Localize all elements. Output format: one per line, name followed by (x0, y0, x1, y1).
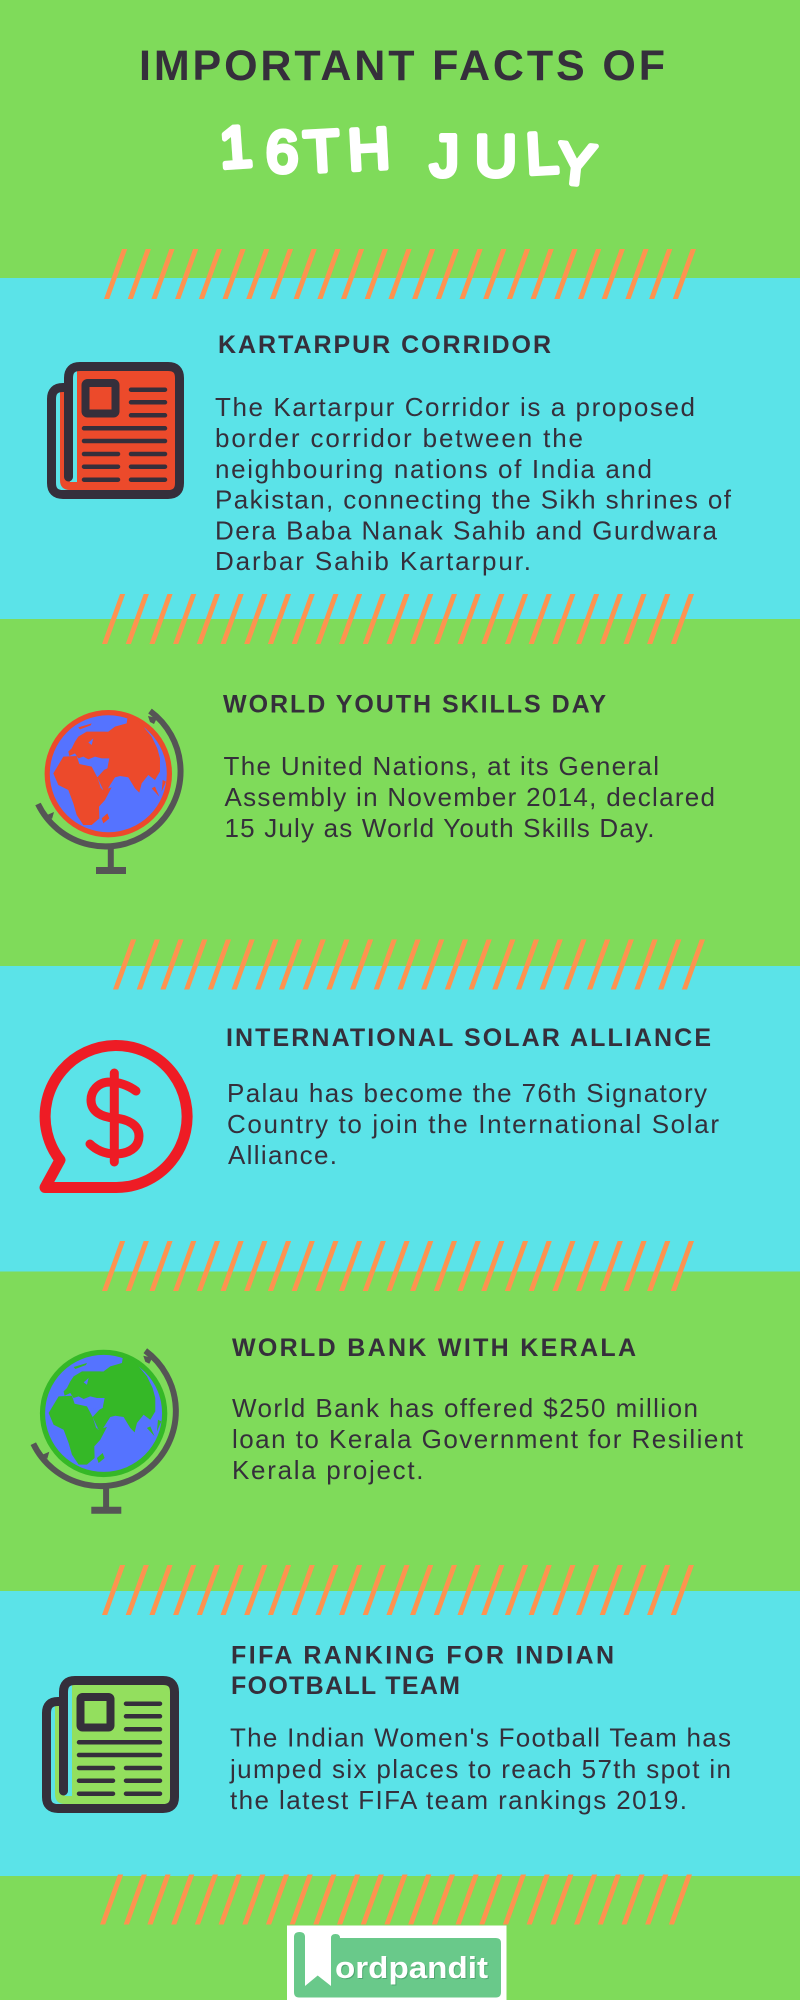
text block: World Bank with Kerala: loan to Kerala Government for Resilient (232, 1424, 744, 1454)
panel: International Solar Alliance (0, 966, 800, 1272)
header panel (0, 0, 800, 278)
stripe divider 2 (102, 594, 694, 644)
text block: World Youth Skills Day: The United Nations, at its General (224, 751, 659, 781)
panel: FIFA Ranking (0, 1591, 800, 1876)
text block: FIFA Ranking: The Indian Women's Football Team has (230, 1722, 731, 1752)
text block: World Youth Skills Day: 15 July as World Youth Skills Day. (224, 813, 654, 843)
heading: FIFA Ranking: FIFA RANKING FOR INDIAN (231, 1642, 614, 1670)
text block: Kartarpur Corridor: neighbouring nations of India and (215, 454, 652, 484)
text block: Kartarpur Corridor (215, 392, 732, 576)
icon: dollar speech bubble (45, 1046, 187, 1188)
title: IMPORTANT FACTS OF (139, 42, 665, 90)
heading: Kartarpur Corridor: KARTARPUR CORRIDOR (218, 331, 551, 359)
text block: FIFA Ranking: jumped six places to reach 57th spot in (229, 1754, 731, 1784)
heading: International Solar Alliance: INTERNATIONAL SOLAR ALLIANCE (226, 1024, 711, 1052)
stripe divider 1 (104, 249, 696, 299)
icon: newspaper red (52, 366, 180, 494)
heading: World Youth Skills Day: WORLD YOUTH SKILLS DAY (223, 690, 606, 718)
text block: Kartarpur Corridor: border corridor between the (215, 423, 583, 453)
text block: International Solar Alliance: Alliance. (228, 1140, 337, 1170)
text block: World Bank with Kerala: World Bank has offered $250 million (232, 1393, 698, 1423)
icon: globe red (38, 710, 181, 874)
panel: World Youth Skills Day (0, 619, 800, 966)
text block: World Youth Skills Day: Assembly in November 2014, declared (224, 782, 715, 812)
date heading: 16TH JULY (217, 114, 599, 199)
heading: FIFA Ranking: FOOTBALL TEAM (231, 1672, 460, 1700)
stripe divider 3 (113, 940, 705, 990)
panel: World Bank with Kerala (0, 1272, 800, 1591)
heading: FIFA Ranking (231, 1642, 614, 1700)
panel: Kartarpur Corridor (0, 278, 800, 619)
text block: World Bank with Kerala (232, 1393, 744, 1485)
text block: FIFA Ranking: the latest FIFA team rankings 2019. (230, 1785, 687, 1815)
text block: International Solar Alliance: Palau has become the 76th Signatory (227, 1078, 707, 1108)
icon: newspaper green (46, 1680, 174, 1808)
text block: Kartarpur Corridor: The Kartarpur Corridor is a proposed (215, 392, 695, 422)
text block: FIFA Ranking (229, 1722, 731, 1815)
footer panel (0, 1876, 800, 2000)
text block: Kartarpur Corridor: Dera Baba Nanak Sahib and Gurdwara (215, 516, 718, 546)
text block: World Youth Skills Day (224, 751, 715, 843)
text block: International Solar Alliance: Country to join the International Solar (227, 1109, 719, 1139)
text block: International Solar Alliance (227, 1078, 719, 1170)
text block: Kartarpur Corridor: Pakistan, connecting the Sikh shrines of (215, 484, 732, 514)
icon: globe green (33, 1350, 176, 1514)
logo: Wordpandit (287, 1926, 506, 2000)
logo: Wordpandit: ordpandit (335, 1950, 488, 1985)
stripe divider 4 (102, 1241, 694, 1291)
text block: World Bank with Kerala: Kerala project. (232, 1455, 424, 1485)
stripe divider 6 (100, 1874, 692, 1924)
stripe divider 5 (102, 1565, 694, 1615)
text block: Kartarpur Corridor: Darbar Sahib Kartarpur. (215, 546, 531, 576)
heading: World Bank with Kerala: WORLD BANK WITH KERALA (232, 1334, 636, 1362)
